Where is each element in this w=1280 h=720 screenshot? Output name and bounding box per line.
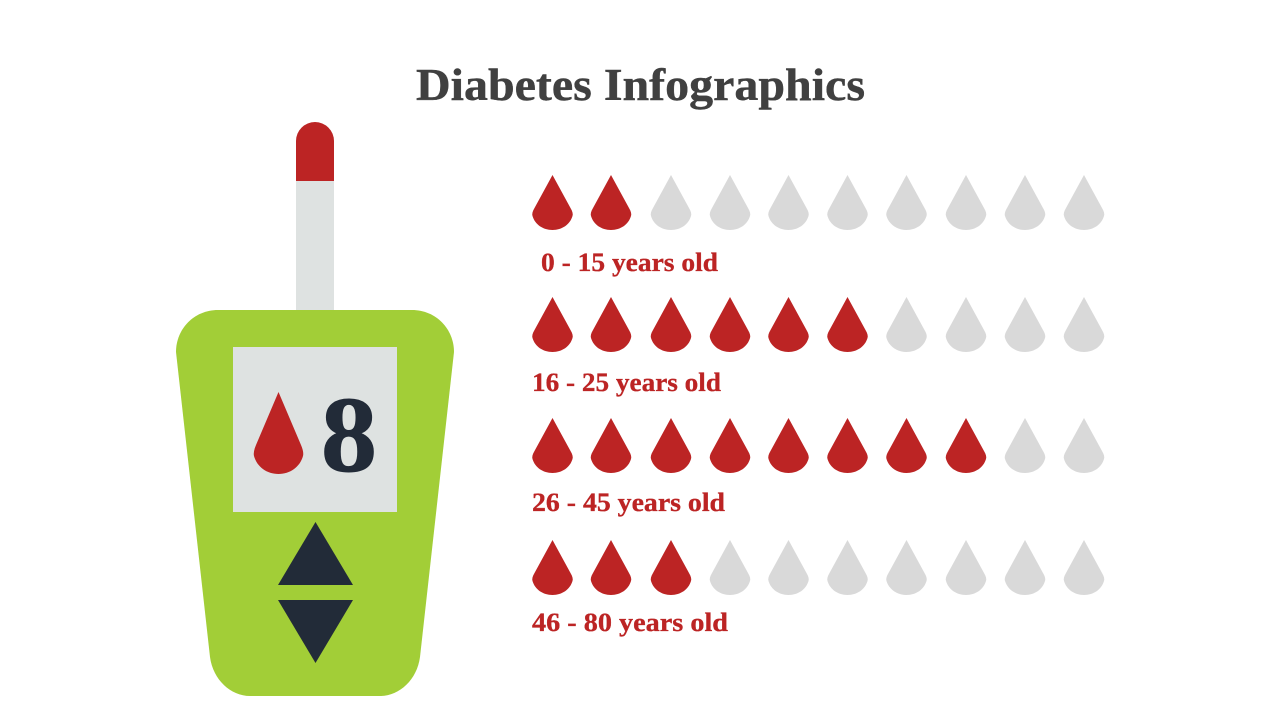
label: 0 - 15 years old	[541, 248, 719, 277]
meter body	[176, 310, 454, 696]
label: 26 - 45 years old	[532, 488, 726, 517]
row: 0 - 15 years old	[532, 175, 1104, 277]
drops: 6 of 10 filled	[532, 297, 1104, 352]
screen reading: 8	[321, 376, 377, 495]
meter screen	[233, 347, 397, 512]
row: 46 - 80 years old	[532, 540, 1104, 637]
drops: 3 of 10 filled	[532, 540, 1104, 595]
label: 46 - 80 years old	[532, 608, 729, 637]
row: 16 - 25 years old	[532, 297, 1104, 397]
drops: 2 of 10 filled	[532, 175, 1104, 230]
title: Diabetes Infographics	[416, 60, 865, 110]
row: 26 - 45 years old	[532, 418, 1104, 517]
icon: up button	[278, 522, 353, 585]
drops: 8 of 10 filled	[532, 418, 1104, 473]
test strip	[296, 122, 334, 312]
icon: blood drop on screen	[254, 392, 303, 474]
label: 16 - 25 years old	[532, 368, 722, 397]
glucose meter illustration	[176, 122, 454, 696]
icon: down button	[278, 600, 353, 663]
